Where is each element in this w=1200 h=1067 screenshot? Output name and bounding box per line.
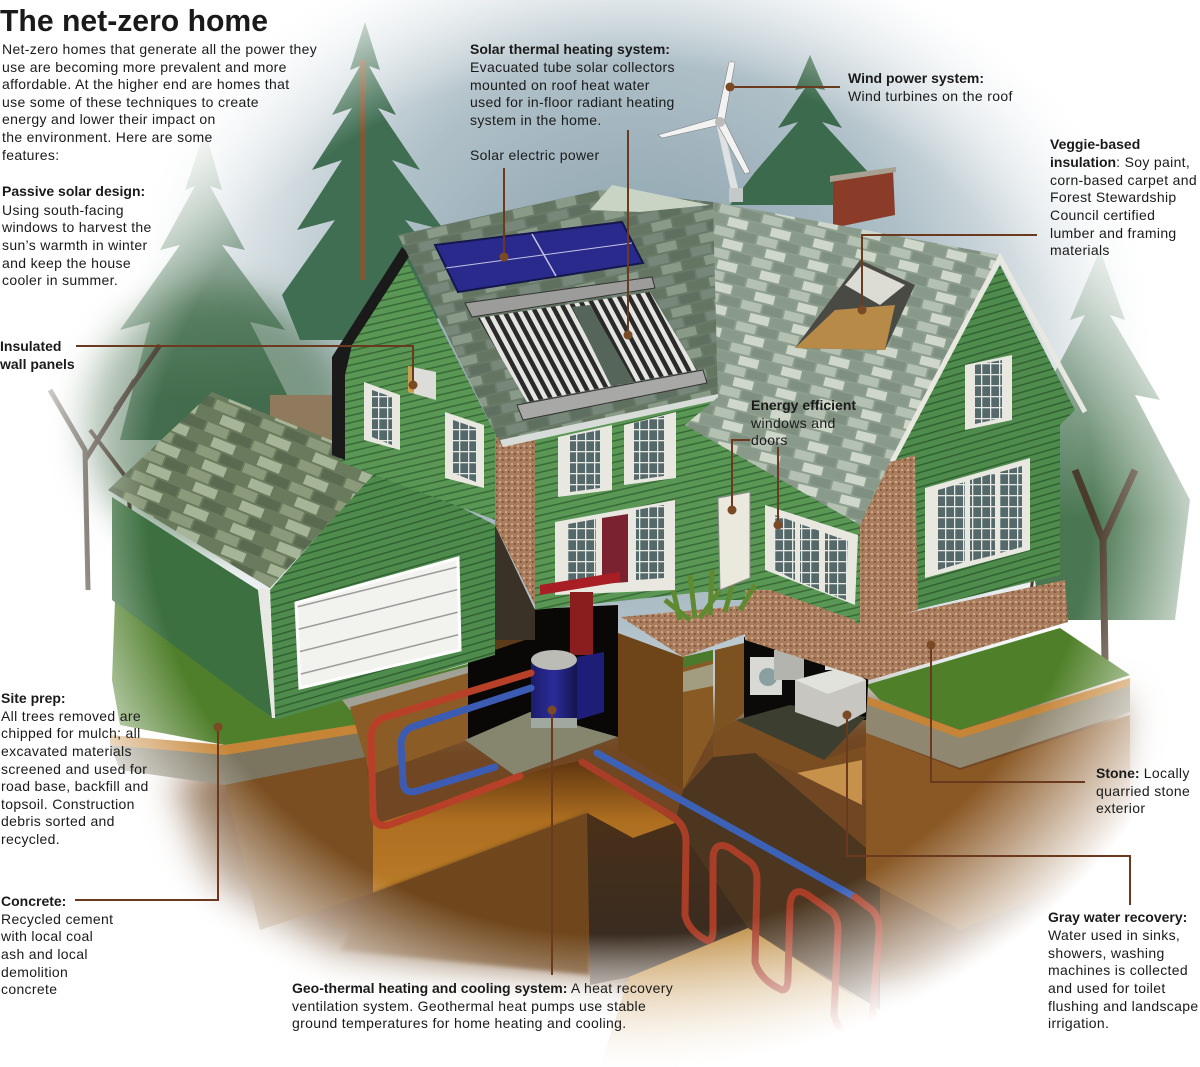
- bare trees: left: [50, 345, 165, 600]
- right main roof: [685, 202, 1000, 525]
- text: insulated wall panels: Insulated: [0, 338, 61, 354]
- text: concrete: demolition: [1, 964, 68, 980]
- text: site prep: All trees removed are: [1, 708, 141, 724]
- text: site prep: screened and used for: [1, 761, 147, 777]
- text: wind power system: Wind power system:: [848, 70, 984, 86]
- heat pump unit: [531, 572, 620, 728]
- window row: energy-efficient windows: [765, 505, 858, 605]
- intro text: use some of these techniques to create: [2, 94, 259, 110]
- basement utility room: [713, 637, 870, 805]
- windows: front wall upper: [558, 412, 676, 497]
- soil behind pit: [350, 673, 468, 775]
- text: solar electric power: Solar electric power: [470, 147, 600, 163]
- text: site prep: topsoil. Construction: [1, 796, 135, 812]
- house: stone column left: [495, 425, 535, 605]
- intro text: the environment. Here are some: [2, 129, 213, 145]
- stone foundation band: [621, 580, 1068, 680]
- title: The net-zero home: [0, 3, 268, 38]
- insulated wall panel sample: [408, 366, 436, 400]
- text: solar thermal heating system: mounted on roof heat water: [470, 77, 650, 93]
- text: gray water recovery: Gray water recovery:: [1048, 909, 1187, 925]
- chimney: [830, 167, 896, 228]
- text: geo-thermal heating and cooling system: ground temperatures for home heating and cooling.: [292, 1015, 626, 1031]
- text: site prep: debris sorted and: [1, 813, 115, 829]
- text: gray water recovery: irrigation.: [1048, 1015, 1109, 1031]
- wind turbine: [658, 62, 750, 202]
- text: wind power system: Wind turbines on the roof: [848, 88, 1013, 104]
- right stone column: [860, 455, 918, 625]
- text: energy efficient windows and doors: doors: [751, 432, 788, 448]
- garage door: [296, 558, 460, 688]
- text: veggie-based insulation: Veggie-based: [1050, 136, 1140, 152]
- intro text: use are becoming more prevalent and more: [2, 59, 287, 75]
- text: passive solar design: windows to harvest the: [1, 219, 152, 235]
- text: passive solar design: Passive solar design:: [2, 183, 145, 199]
- text: veggie-based insulation: Forest Stewardship: [1050, 189, 1177, 205]
- left lawn and garage pad: [110, 600, 503, 785]
- text: concrete: ash and local: [1, 946, 88, 962]
- text: concrete: Recycled cement: [1, 911, 113, 927]
- text: site prep: recycled.: [1, 831, 60, 847]
- text: veggie-based insulation: materials: [1050, 242, 1110, 258]
- dark wall behind serpentine pipes: [675, 753, 880, 1010]
- text: geo-thermal heating and cooling system: Geo-thermal heating and cooling system: A heat recovery: [292, 980, 673, 996]
- deep trench dark wall: [587, 813, 748, 985]
- gray water tank: [795, 650, 866, 727]
- solar thermal evacuated tubes: [465, 277, 707, 420]
- dormer opening showing insulation: [795, 260, 915, 350]
- window: right gable upper: [965, 355, 1012, 430]
- tree: right trunk and branches: [1000, 450, 1135, 660]
- right gable: [895, 265, 1075, 610]
- roof-mounted solar electric panel: [435, 222, 643, 292]
- windows: front wall lower with cutaway duct: [555, 500, 675, 595]
- house: front wall: [535, 385, 722, 610]
- text: solar thermal heating system: system in the home.: [470, 112, 602, 128]
- garage roof: [108, 392, 385, 588]
- leader lines and dots: [75, 82, 1130, 975]
- text: concrete: Concrete:: [1, 893, 66, 909]
- text: energy efficient windows and doors: Energy efficient: [751, 397, 856, 413]
- right lawn: [866, 628, 1130, 768]
- text: gray water recovery: Water used in sinks,: [1048, 927, 1180, 943]
- text: gray water recovery: showers, washing: [1048, 945, 1165, 961]
- icon: front door: [718, 492, 750, 590]
- text: insulated wall panels: wall panels: [0, 356, 75, 372]
- intro text: energy and lower their impact on: [2, 111, 216, 127]
- window: right gable lower: [925, 458, 1030, 578]
- garage left wall: [112, 497, 272, 718]
- concrete slab: [465, 712, 618, 775]
- text: site prep: road base, backfill and: [1, 778, 149, 794]
- back roof dormer light: [590, 185, 710, 212]
- text: passive solar design: and keep the house: [2, 255, 131, 271]
- text: gray water recovery: flushing and landscape: [1048, 998, 1198, 1014]
- text: concrete: concrete: [1, 981, 57, 997]
- main roof: [398, 190, 718, 443]
- bottom excavation floor: [600, 928, 900, 1067]
- windows: left wing: [364, 382, 484, 488]
- text: stone: Stone: Locally: [1096, 765, 1190, 781]
- pit: mechanical room: [468, 605, 618, 775]
- black fascia of the left gable: [332, 247, 410, 460]
- garage front gable: [270, 465, 495, 720]
- text: veggie-based insulation: corn-based carpet and: [1050, 172, 1197, 188]
- intro text: affordable. At the higher end are homes that: [2, 76, 289, 92]
- text: stone: quarried stone: [1096, 783, 1190, 799]
- text: passive solar design: cooler in summer.: [2, 272, 118, 288]
- ground-loop pipes: [371, 673, 879, 1050]
- text: solar thermal heating system: Evacuated tube solar collectors: [470, 59, 675, 75]
- text: site prep: chipped for mulch; all: [1, 725, 141, 741]
- garage trim: [258, 588, 275, 718]
- text: veggie-based insulation: Council certified: [1050, 207, 1155, 223]
- front soil face below the ledge: [340, 813, 590, 975]
- text: passive solar design: sun’s warmth in winter: [2, 237, 148, 253]
- background fence: [270, 395, 340, 465]
- text: geo-thermal heating and cooling system: ventilation system. Geothermal heat pumps use stable: [292, 998, 646, 1014]
- text: gray water recovery: and used for toilet: [1048, 980, 1166, 996]
- gable eave trim: [892, 258, 1085, 462]
- text: solar thermal heating system: used for in-floor radiant heating: [470, 94, 675, 110]
- ledge: orange soil floor: [373, 760, 675, 893]
- soil below left strata: [225, 757, 373, 930]
- background forest glow: [80, 290, 350, 550]
- pine tree: behind roof right: [730, 55, 888, 205]
- pine tree: left faded: [120, 130, 310, 440]
- text: veggie-based insulation: lumber and framing: [1050, 225, 1177, 241]
- pine tree: tall left-centre: [282, 22, 470, 340]
- garage: [108, 392, 495, 720]
- basement wall under left column: [495, 525, 535, 640]
- text: solar thermal heating system: Solar thermal heating system:: [470, 41, 670, 57]
- central soil pillar: [618, 633, 744, 790]
- right soil block: [866, 715, 1130, 930]
- text: stone: exterior: [1096, 800, 1145, 816]
- intro text: features:: [2, 147, 59, 163]
- text: passive solar design: Using south-facing: [2, 202, 124, 218]
- house: entry wall under right roof: [715, 430, 862, 625]
- text: site prep: Site prep:: [1, 690, 66, 706]
- text: energy efficient windows and doors: windows and: [750, 415, 836, 431]
- text: site prep: excavated materials: [1, 743, 132, 759]
- text: veggie-based insulation: insulation: Soy paint,: [1050, 154, 1190, 170]
- planter shrubs: [665, 570, 755, 620]
- main roof eave: [500, 394, 718, 447]
- text: gray water recovery: machines is collected: [1048, 962, 1188, 978]
- text: concrete: with local coal: [0, 928, 93, 944]
- intro text: Net-zero homes that generate all the power they: [2, 41, 317, 57]
- icon: washing machine: [750, 650, 804, 695]
- house: left wing wall: [335, 257, 495, 520]
- pine tree: right faded: [1025, 250, 1190, 620]
- underground soil mass: [170, 700, 1130, 1000]
